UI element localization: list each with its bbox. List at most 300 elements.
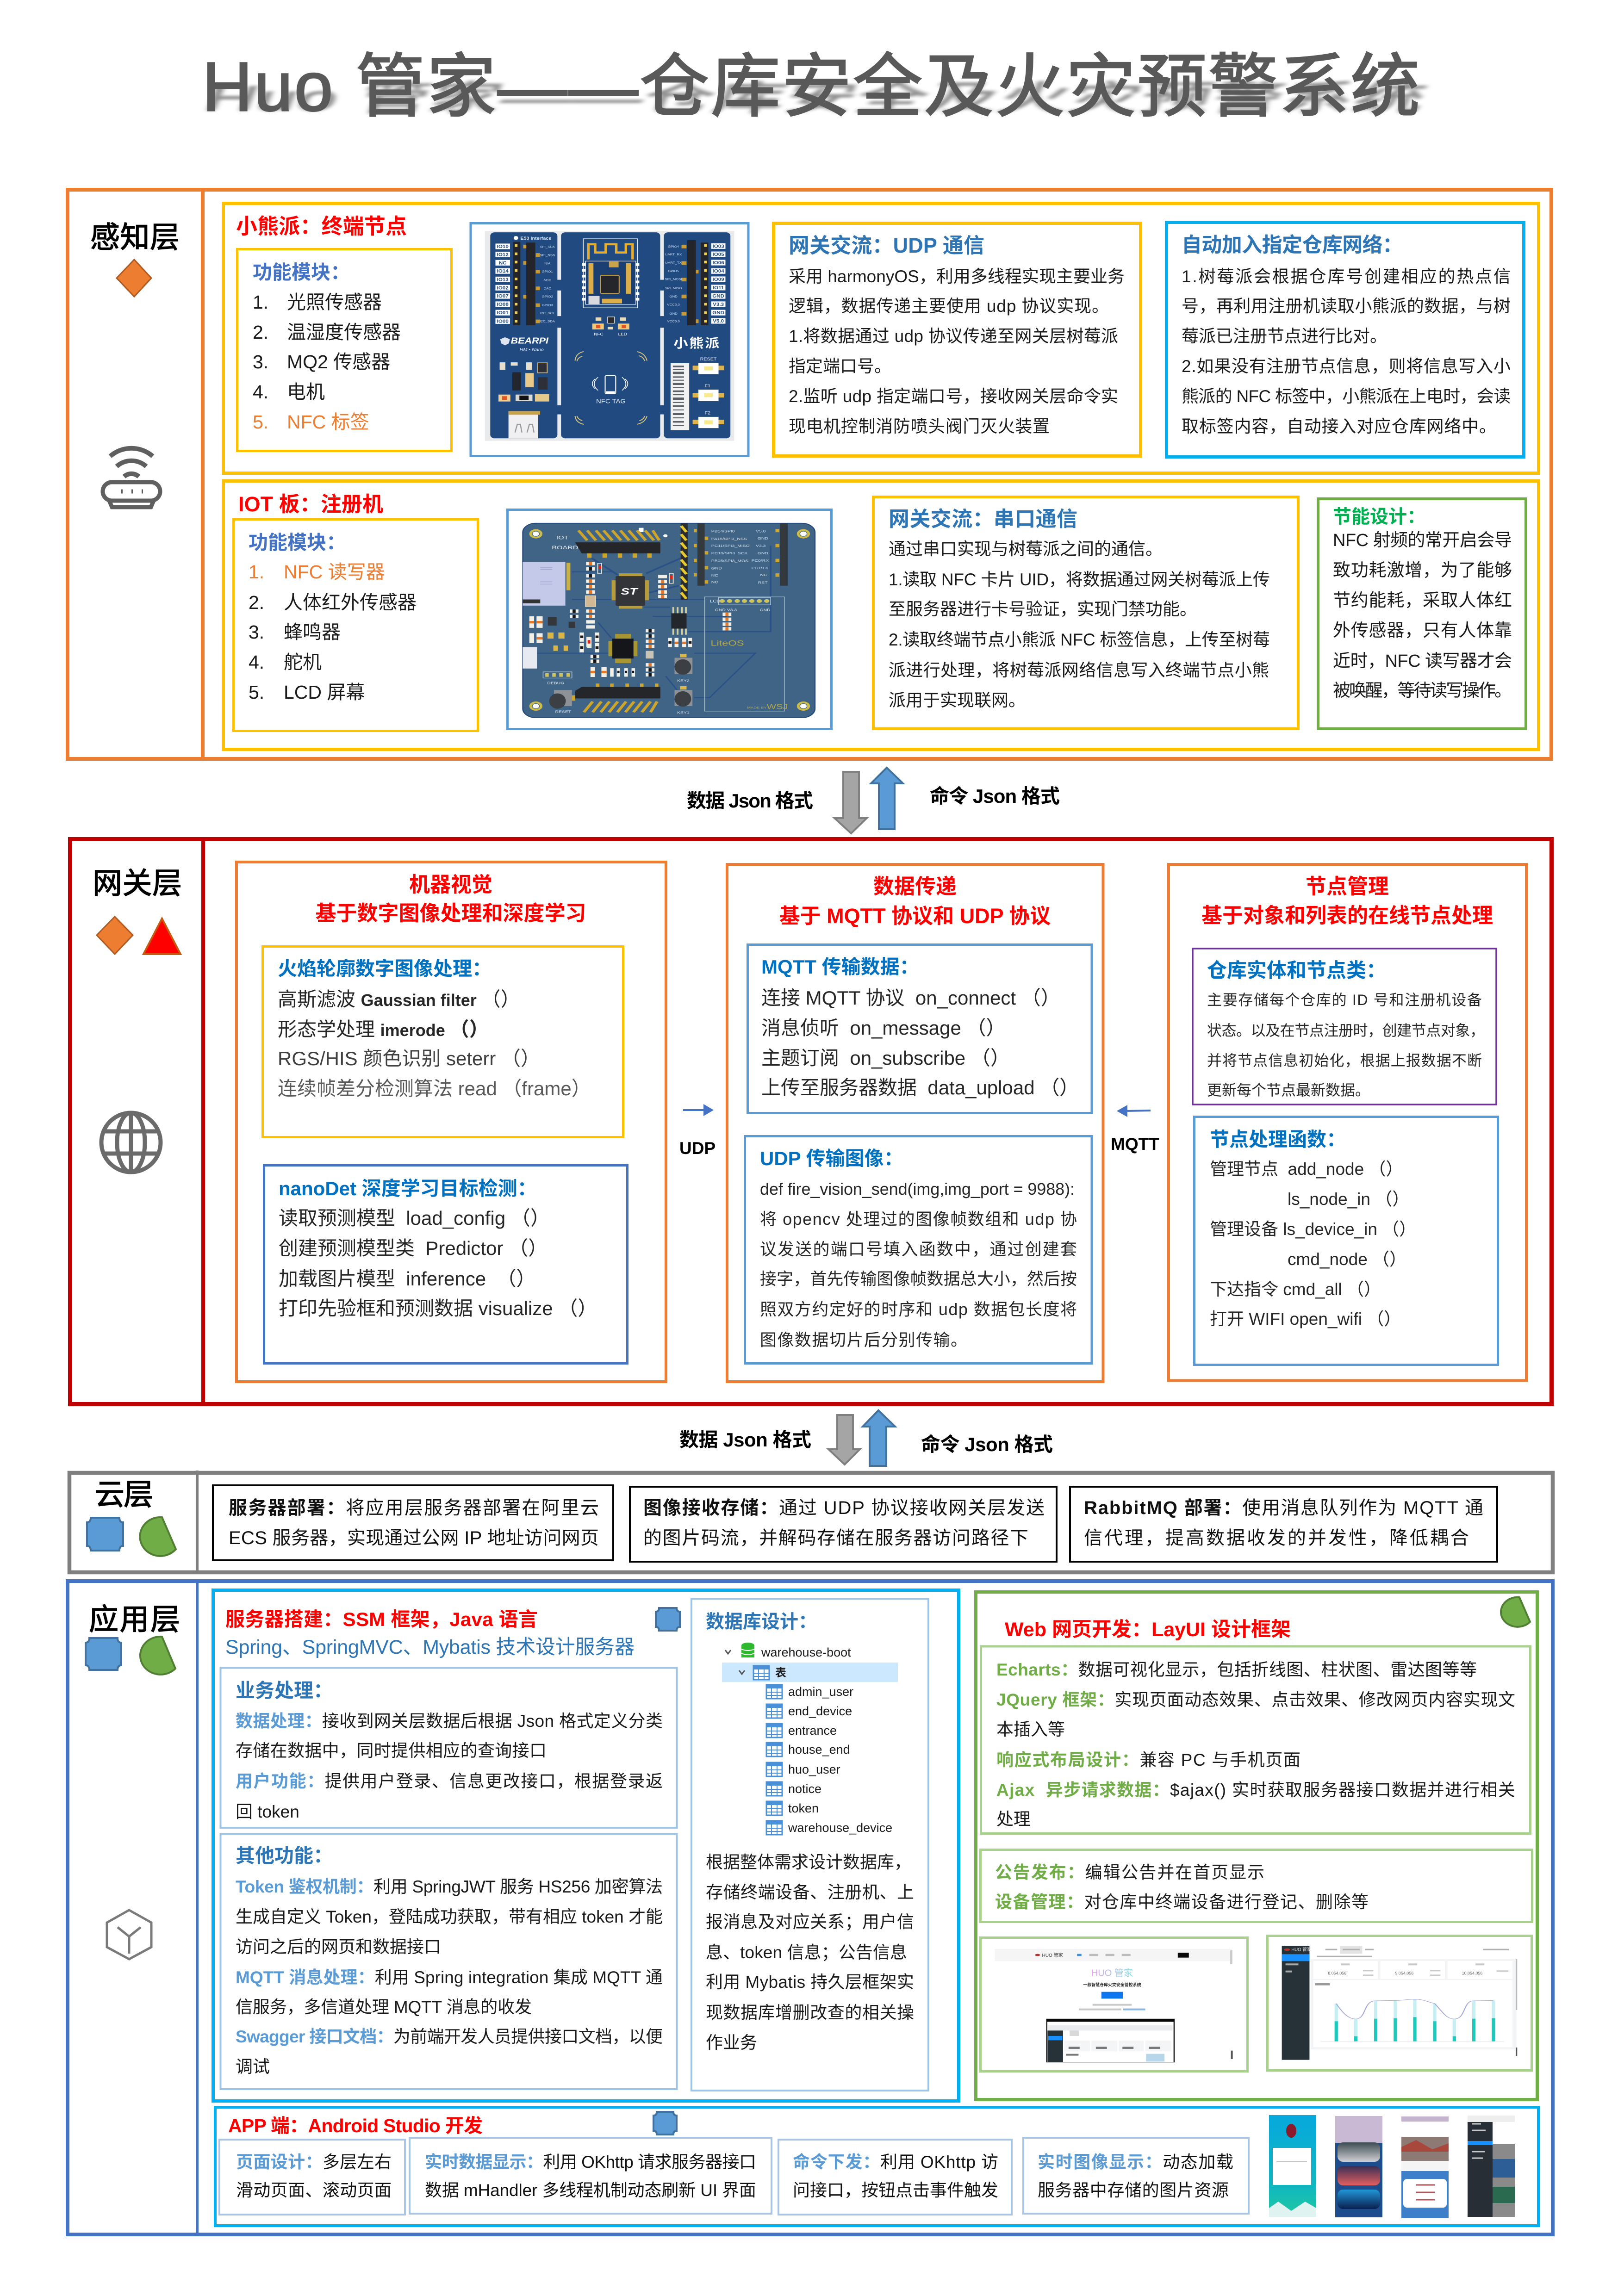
image: BearPi board: GPIO1 (542, 270, 553, 273)
panel: node management: 节点管理 (1306, 875, 1389, 898)
text block: serial gateway communication: 派进行处理，将树莓派网络信息写入终端节点小熊 (889, 661, 1269, 680)
heading: application layer: 应用层 (89, 1603, 180, 1636)
panel: database design: 根据整体需求设计数据库， (706, 1853, 911, 1872)
arrows: perception to gateway: 数据 Json 格式 (687, 790, 813, 812)
text block: web tech (981, 1646, 1530, 1833)
image: dashboard screenshot (1267, 1936, 1532, 2070)
text block: auto-join warehouse network: 2.如果没有注册节点信息，则将信息写入小 (1182, 357, 1511, 376)
image: BearPi board: NFC (594, 332, 604, 336)
text block: auto-join warehouse network: 1.树莓派会根据仓库号创建相应的热点信 (1182, 267, 1511, 286)
text block: energy saving design: 节能设计： (1333, 507, 1425, 527)
panel: server setup: Spring、SpringMVC、Mybatis 技术设计服务器 (225, 1636, 635, 1658)
image: BearPi board: UART_TX (665, 261, 682, 265)
text block: UDP gateway communication (774, 223, 1140, 456)
text block: node functions (1194, 1117, 1498, 1365)
text block: business processing: 存储在数据中，同时提供相应的查询接口 (236, 1741, 547, 1760)
arrows: gateway to cloud (679, 1410, 1053, 1466)
text block: page design: 页面设计：多层左右 (236, 2153, 392, 2172)
image: BearPi board: VCC3.3 (667, 303, 680, 306)
text block: serial gateway communication: 网关交流：串口通信 (889, 507, 1077, 531)
panel: machine vision: 基于数字图像处理和深度学习 (315, 901, 586, 925)
text block: UDP image transfer: def fire_vision_send(img,img_port = 9988): (760, 1179, 1075, 1198)
image: BearPi board: IO01 (497, 310, 509, 316)
panel: application layer (68, 1579, 1553, 2236)
text block: server deployment: 服务器部署：将应用层服务器部署在阿里云 (229, 1498, 599, 1518)
text block: business processing: 回 token (236, 1802, 299, 1821)
text block: page design (219, 2140, 405, 2215)
text block: RabbitMQ deployment: RabbitMQ 部署：使用消息队列作为 MQTT 通 (1084, 1498, 1483, 1518)
text block: page design: 滑动页面、滚动页面 (236, 2181, 392, 2200)
text block: flame contour image processing: 高斯滤波 Gaussian filter （） (278, 988, 520, 1010)
text block: serial gateway communication (873, 497, 1298, 729)
text block: other functions: 信服务，多信道处理 MQTT 消息的收发 (236, 1998, 532, 2017)
arrows: gateway to cloud: 命令 Json 格式 (921, 1433, 1053, 1455)
image: IoT board: V3.3 (756, 544, 765, 548)
icon: small blue plaque (656, 1608, 680, 1631)
image: BearPi board: ADC (543, 278, 552, 282)
arrow: MQTT (1111, 1105, 1159, 1154)
text block: realtime data display: 实时数据显示：利用 OKhttp 请求服务器接口 (425, 2153, 756, 2172)
text block: flame contour image processing: 连续帧差分检测算法 read （frame） (278, 1078, 591, 1099)
image: IoT board: GND V3.3 (715, 608, 737, 612)
text block: business processing: 用户功能：提供用户登录、信息更改接口，根据登录返 (236, 1772, 663, 1791)
image: homepage screenshot: HUO 管家 (1042, 1952, 1063, 1958)
text block: serial gateway communication: 派用于实现联网。 (889, 691, 1026, 710)
text block: auto-join warehouse network: 自动加入指定仓库网络： (1182, 234, 1403, 256)
image: IoT board: V5.0 (756, 529, 765, 533)
panel: function modules: 4. (253, 381, 268, 403)
panel: IoT function modules: 1. (249, 561, 264, 583)
text block: web tech: Echarts：数据可视化显示，包括折线图、柱状图、雷达图等等 (996, 1660, 1477, 1679)
image: BearPi board: UART_RX (665, 253, 682, 256)
text block: notices and devices: 公告发布：编辑公告并在首页显示 (995, 1863, 1264, 1882)
text block: UDP gateway communication: 1.将数据通过 udp 协议传递至网关层树莓派 (789, 327, 1118, 346)
image: BearPi board: IO04 (713, 269, 724, 274)
image: IoT board: GND (711, 566, 722, 570)
image: BearPi board: GND (669, 294, 678, 298)
image: BearPi board: SPI_MISO (665, 286, 682, 290)
text block: command dispatch: 命令下发：利用 OKhttp 访 (793, 2153, 998, 2172)
text block: warehouse entity and node class: 状态。以及在节点注册时，创建节点对象， (1207, 1022, 1485, 1039)
image: BearPi board: I2C_SDA (540, 319, 555, 323)
image: dashboard screenshot: 8,054,056 (1328, 1971, 1346, 1975)
image: IoT board: RST (758, 581, 768, 584)
panel: IoT function modules: 人体红外传感器 (284, 592, 417, 613)
panel: IoT function modules (233, 519, 478, 731)
image: BearPi board: IO06 (713, 261, 724, 266)
text block: web tech: 本插入等 (996, 1720, 1065, 1739)
image: dashboard screenshot: 9,054,056 (1395, 1971, 1413, 1975)
tree: database tables: entrance (788, 1724, 837, 1738)
arrow: UDP (679, 1104, 716, 1158)
panel: function modules: 3. (253, 351, 268, 372)
image: homepage screenshot: HUO 管家 (1091, 1968, 1133, 1979)
image: BearPi board: IO13 (497, 277, 509, 282)
text block: UDP image transfer: 图像数据切片后分别传输。 (760, 1330, 967, 1349)
image: BearPi board: GPIO2 (542, 295, 553, 298)
text block: command dispatch (778, 2140, 1012, 2215)
panel: database design: 报消息及对应关系；用户信 (706, 1912, 914, 1931)
text block: other functions: Token 鉴权机制：利用 SpringJWT 服务 HS256 加密算法 (236, 1877, 663, 1896)
image: BearPi board: E53 Interface (520, 236, 552, 241)
panel: database design: 存储终端设备、注册机、上 (706, 1883, 914, 1902)
text block: flame contour image processing (263, 947, 623, 1137)
panel: node management (1169, 864, 1526, 1381)
image: BearPi board: IO05 (713, 252, 724, 257)
text block: nanoDet detection (264, 1165, 628, 1363)
text block: nanoDet detection: nanoDet 深度学习目标检测： (279, 1178, 537, 1199)
text block: energy saving design: NFC 射频的常开启会导 (1333, 531, 1512, 550)
image: BearPi board: IO07 (497, 294, 509, 299)
image: BearPi board: GPIO5 (668, 269, 679, 273)
image: BearPi board: IO08 (497, 302, 509, 307)
text block: flame contour image processing: 形态学处理 imerode （） (278, 1018, 489, 1040)
text block: auto-join warehouse network: 莓派已注册节点进行比对。 (1182, 327, 1387, 346)
text block: web tech: Ajax 异步请求数据：$ajax() 实时获取服务器接口数据并进行相关 (996, 1781, 1515, 1800)
panel: database design: 数据库设计： (706, 1612, 817, 1632)
text block: nanoDet detection: 创建预测模型类 Predictor （） (279, 1237, 548, 1259)
panel: data transfer: 基于 MQTT 协议和 UDP 协议 (779, 904, 1051, 928)
image: IoT board: PC0/RX (752, 558, 769, 563)
text block: image receiving storage: 的图片码流，并解码存储在服务器访问路径下 (643, 1528, 1028, 1548)
tree: database tables: notice (788, 1782, 821, 1796)
icon: green chord (140, 1637, 175, 1675)
panel: function modules: 电机 (287, 381, 325, 403)
text block: other functions: 调试 (236, 2057, 270, 2076)
image: BearPi board: RESET (700, 357, 717, 362)
image: BearPi board: F2 (705, 411, 711, 416)
text block: UDP image transfer: 将 opencv 处理过的图像帧数组和 udp 协 (760, 1210, 1077, 1229)
text block: business processing (220, 1668, 677, 1828)
image: IoT board: NC (711, 580, 718, 584)
image: IoT board: NC (711, 573, 718, 577)
tree: database tables: warehouse_device (788, 1821, 892, 1835)
panel: database design: 息、token 信息；公告信息 (706, 1943, 907, 1962)
image: BearPi board: IO03 (713, 244, 724, 249)
text block: nanoDet detection: 打印先验框和预测数据 visualize （） (279, 1297, 597, 1319)
image: IoT board: IOT (556, 534, 569, 540)
icon: diamond (97, 917, 133, 954)
text block: UDP gateway communication: 采用 harmonyOS，利用多线程实现主要业务 (789, 267, 1125, 286)
title: Huo 管家——仓库安全及火灾预警系统 (199, 79, 1432, 118)
image: IoT board: GND (760, 608, 771, 612)
panel: function modules: 温湿度传感器 (287, 322, 401, 343)
heading: gateway layer: 网关层 (93, 867, 182, 900)
image: BearPi board: GND (712, 310, 724, 316)
text block: realtime data display (410, 2138, 772, 2214)
text block: UDP image transfer: 接字，首先传输图像帧数据总大小，然后按 (760, 1269, 1077, 1288)
panel: gateway layer (70, 837, 1551, 1406)
image: IoT board: PA15/SPI3_NSS (711, 537, 747, 541)
image: BearPi board: SPI_MOSI (665, 277, 682, 281)
icon: globe (101, 1113, 161, 1172)
text block: serial gateway communication: 通过串口实现与树莓派之间的通信。 (889, 540, 1163, 558)
text block: flame contour image processing: 火焰轮廓数字图像处理： (278, 958, 492, 980)
image: IoT board: GND (758, 552, 769, 555)
image: BearPi board: IO10 (497, 244, 509, 249)
text block: energy saving design (1318, 499, 1526, 729)
text block: UDP gateway communication: 网关交流：UDP 通信 (789, 234, 984, 257)
arrow: UDP: UDP (679, 1139, 716, 1158)
panel: machine vision (236, 862, 666, 1382)
panel: function modules: MQ2 传感器 (287, 351, 390, 372)
text block: UDP image transfer: 照双方约定好的时序和 udp 数据包长度将 (760, 1300, 1077, 1319)
panel: perception layer (68, 188, 1551, 761)
text block: UDP image transfer (745, 1136, 1092, 1363)
image: app screen login (1269, 2115, 1316, 2217)
text block: other functions: Swagger 接口文档：为前端开发人员提供接口文档，以便 (236, 2027, 663, 2046)
tree: database tables: house_end (788, 1743, 850, 1756)
image: BearPi board: I2C_SCL (540, 311, 555, 315)
text block: notices and devices (980, 1850, 1532, 1922)
image: BearPi board: V3.3 (713, 302, 724, 307)
image: IoT board: KEY2 (677, 679, 690, 683)
image: BearPi board: 小熊派 (673, 336, 720, 350)
image: homepage screenshot (980, 1938, 1248, 2071)
text block: command dispatch: 问接口，按钮点击事件触发 (793, 2181, 998, 2200)
icon: orange diamond (117, 260, 151, 297)
text block: serial gateway communication: 2.读取终端节点小熊派 NFC 标签信息，上传至树莓 (889, 630, 1270, 649)
text block: UDP gateway communication: 现电机控制消防喷头阀门灭火装置 (789, 417, 1050, 436)
text block: MQTT data: 消息侦听 on_message （） (761, 1017, 1006, 1039)
panel: database design: 现数据库增删改查的相关操 (706, 2003, 914, 2022)
image: IoT board: DEBUG (547, 681, 564, 685)
image: BearPi board: N/A (544, 261, 550, 265)
image: dashboard screenshot: 10,054,056 (1462, 1971, 1482, 1975)
text block: RabbitMQ deployment: 信代理，提高数据收发的并发性，降低耦合 (1084, 1528, 1469, 1548)
text block: UDP image transfer: UDP 传输图像： (760, 1148, 903, 1169)
text block: node functions: 管理节点 add_node （） (1210, 1160, 1403, 1179)
heading: BearPi: 小熊派：终端节点 (236, 214, 407, 238)
icon: triangle (143, 918, 180, 954)
image: BearPi board: GPIO4 (668, 245, 679, 248)
text block: auto-join warehouse network: 号，再利用注册机读取小熊派的数据，与树 (1182, 297, 1511, 316)
image: BearPi board: F1 (705, 384, 711, 389)
text block: node functions: 下达指令 cmd_all （） (1210, 1280, 1381, 1299)
image: IoT board: LiteOS (710, 639, 744, 648)
image: BearPi board: IO02 (497, 285, 509, 291)
panel: function modules: NFC 标签 (287, 411, 369, 433)
icon: router (103, 448, 160, 507)
text block: realtime image display: 服务器中存储的图片资源 (1038, 2181, 1229, 2200)
text block: energy saving design: 近时，NFC 读写器才会 (1333, 652, 1512, 671)
text block: warehouse entity and node class: 主要存储每个仓库的 ID 号和注册机设备 (1207, 992, 1482, 1008)
image: IoT board: PC10/SPI3_SCK (711, 552, 747, 555)
panel: database design: 利用 Mybatis 持久层框架实 (706, 1973, 914, 1992)
text block: energy saving design: 节约能耗，采取人体红 (1333, 591, 1512, 610)
tree: database tables: warehouse-boot (761, 1645, 851, 1659)
text block: realtime image display: 实时图像显示：动态加载 (1038, 2153, 1233, 2172)
text block: MQTT data: 连接 MQTT 协议 on_connect （） (761, 987, 1060, 1009)
panel: IoT function modules: NFC 读写器 (284, 561, 385, 583)
text block: warehouse entity and node class: 仓库实体和节点类： (1207, 960, 1386, 982)
panel: data transfer: 数据传递 (873, 875, 957, 898)
image: BearPi board: NC (499, 261, 507, 266)
arrows: perception to gateway (687, 768, 1060, 833)
image: BearPi board: VCC5.0 (667, 319, 680, 323)
title: Huo 管家——仓库安全及火灾预警系统 (202, 48, 1420, 125)
text block: MQTT data (748, 945, 1092, 1113)
panel: function modules: 5. (253, 411, 268, 433)
icon: small blue plaque (653, 2112, 677, 2135)
image: BearPi board: LED (618, 332, 627, 336)
image: BearPi board: IO14 (497, 269, 509, 274)
image: BearPi board: BEARPI (511, 336, 548, 346)
text block: warehouse entity and node class: 更新每个节点最新数据。 (1207, 1082, 1370, 1098)
panel: function modules: 2. (253, 322, 268, 343)
text block: node functions: 管理设备 ls_device_in （） (1210, 1220, 1416, 1239)
image: BearPi board: GPIO3 (542, 303, 553, 307)
text block: other functions: 生成自定义 Token，登陆成功获取，带有相应 token 才能 (236, 1907, 663, 1926)
image: BearPi board: GND (669, 311, 678, 316)
text block: server deployment (213, 1485, 613, 1560)
image: IoT board: MADE BY (747, 706, 767, 709)
tree: database tables (722, 1643, 898, 1835)
panel: function modules: 1. (253, 292, 268, 313)
image: IoT board: PC11/SPI3_MISO (711, 544, 750, 548)
heading: cloud layer: 云层 (95, 1478, 153, 1511)
text block: energy saving design: 外传感器，只有人体靠 (1333, 621, 1512, 640)
heading: IoT board: IOT 板：注册机 (238, 492, 383, 516)
image: BearPi board: IO11 (713, 285, 724, 291)
text block: UDP gateway communication: 指定端口号。 (789, 357, 891, 376)
arrows: perception to gateway: 命令 Json 格式 (930, 785, 1060, 807)
image: IoT board: ST (621, 587, 639, 597)
image: BearPi board: NFC TAG (596, 398, 626, 404)
text block: web tech: 处理 (996, 1810, 1031, 1829)
panel: IoT function modules: LCD 屏幕 (284, 682, 365, 703)
image: IoT board (507, 510, 831, 729)
panel: app development: APP 端：Android Studio 开发 (228, 2115, 483, 2136)
text block: MQTT data: 主题订阅 on_subscribe （） (761, 1047, 1010, 1069)
panel: IoT function modules: 蜂鸣器 (284, 621, 341, 643)
panel: server setup (213, 1590, 959, 2101)
image: BearPi board: HM • Nano (520, 348, 544, 352)
panel: BearPi terminal node (223, 204, 1538, 473)
panel: app development (215, 2107, 1538, 2226)
text block: MQTT data: MQTT 传输数据： (761, 956, 919, 978)
text block: serial gateway communication: 至服务器进行卡号验证，实现门禁功能。 (889, 600, 1197, 619)
text block: warehouse entity and node class: 并将节点信息初始化，根据上报数据不断 (1207, 1052, 1482, 1069)
arrows: gateway to cloud: 数据 Json 格式 (679, 1429, 811, 1451)
icon: green chord (140, 1517, 176, 1556)
text block: UDP gateway communication: 2.监听 udp 指定端口号，接收网关层命令实 (789, 387, 1118, 406)
image: IoT board: KEY1 (677, 711, 690, 714)
panel: database design (691, 1599, 928, 2091)
text block: other functions: 其他功能： (236, 1845, 333, 1867)
panel: IoT function modules: 功能模块： (249, 532, 346, 553)
tree: database tables: end_device (788, 1704, 852, 1718)
image: BearPi board: SPI_SCK (540, 245, 555, 249)
panel: IoT function modules: 4. (249, 652, 264, 673)
panel: function modules: 功能模块： (253, 261, 350, 283)
panel: cloud layer (69, 1471, 1553, 1574)
text block: energy saving design: 致功耗激增，为了能够 (1333, 561, 1512, 580)
image: app screen cards (1335, 2116, 1382, 2217)
image: IoT board: WSJ (767, 703, 788, 711)
text block: business processing: 业务处理： (236, 1680, 333, 1701)
panel: IoT function modules: 2. (249, 592, 264, 613)
text block: warehouse entity and node class (1193, 949, 1496, 1105)
icon: small green chord (1501, 1597, 1530, 1627)
text block: auto-join warehouse network (1166, 222, 1524, 457)
text block: node functions: 节点处理函数： (1210, 1129, 1346, 1150)
image: IoT board: GND (758, 537, 769, 540)
icon: blue plaque (87, 1518, 123, 1551)
text block: auto-join warehouse network: 熊派的 NFC 标签中，小熊派在上电时，会读 (1182, 387, 1511, 406)
image: IoT board: LCD (710, 600, 721, 604)
image: IoT board: BOARD (552, 544, 578, 550)
image: BearPi board: IO12 (497, 252, 509, 257)
text block: realtime data display: 数据 mHandler 多线程机制动态刷新 UI 界面 (425, 2181, 756, 2200)
image: app screen dashboard (1468, 2116, 1515, 2217)
text block: other functions: MQTT 消息处理：利用 Spring integration 集成 MQTT 通 (236, 1968, 663, 1987)
text block: web tech: 响应式布局设计：兼容 PC 与手机页面 (996, 1750, 1300, 1769)
panel: node management: 基于对象和列表的在线节点处理 (1201, 904, 1493, 927)
panel: IoT function modules: 舵机 (284, 652, 322, 673)
text block: image receiving storage (630, 1487, 1057, 1562)
image: app screen photo (1401, 2116, 1449, 2218)
panel: function modules: 光照传感器 (287, 292, 382, 313)
tree: database tables: huo_user (788, 1762, 840, 1776)
panel: IoT function modules: 5. (249, 682, 264, 703)
panel: machine vision: 机器视觉 (409, 873, 492, 896)
image: BearPi board: IO00 (497, 319, 509, 324)
text block: notices and devices: 设备管理：对仓库中终端设备进行登记、删除等 (995, 1893, 1369, 1911)
image: BearPi board (471, 223, 748, 456)
text block: UDP image transfer: 议发送的端口号填入函数中，通过创建套 (760, 1240, 1077, 1259)
text block: business processing: 数据处理：接收到网关层数据后根据 Json 格式定义分类 (236, 1712, 663, 1731)
text block: energy saving design: 被唤醒，等待读写操作。 (1333, 681, 1512, 701)
panel: database design: 作业务 (706, 2033, 757, 2052)
arrow: MQTT: MQTT (1111, 1135, 1159, 1154)
icon: hexagon cube (107, 1910, 151, 1959)
text block: server deployment: ECS 服务器，实现通过公网 IP 地址访问网页 (229, 1528, 599, 1548)
image: BearPi board: DAC (543, 286, 552, 290)
text block: UDP gateway communication: 逻辑，数据传递主要使用 udp 协议实现。 (789, 297, 1109, 316)
image: homepage screenshot: 一款智慧仓库火灾安全管控系统 (1083, 1982, 1141, 1987)
text block: flame contour image processing: RGS/HIS 颜色识别 seterr （） (278, 1048, 540, 1069)
image: IoT board: PC1/TX (752, 566, 768, 570)
tree: database tables: token (788, 1801, 819, 1815)
image: BearPi board: GND (712, 294, 724, 299)
text block: node functions: 打开 WIFI open_wifi （） (1210, 1309, 1401, 1328)
text block: image receiving storage: 图像接收存储：通过 UDP 协议接收网关层发送 (643, 1498, 1045, 1518)
panel: data transfer (727, 864, 1103, 1382)
text block: web tech: JQuery 框架：实现页面动态效果、点击效果、修改网页内容实现文 (996, 1690, 1515, 1709)
text block: MQTT data: 上传至服务器数据 data_upload （） (761, 1077, 1079, 1098)
image: BearPi board: SPI_NSS (540, 253, 555, 257)
image: IoT board: PB14/SPI0 (711, 529, 735, 533)
panel: server setup: 服务器搭建：SSM 框架，Java 语言 (225, 1608, 538, 1630)
heading: perception layer: 感知层 (90, 221, 180, 254)
panel: function modules (237, 249, 452, 451)
text block: realtime image display (1023, 2138, 1249, 2214)
panel: web development (976, 1592, 1537, 2100)
panel: IoT board registrar (223, 481, 1538, 750)
text block: auto-join warehouse network: 取标签内容，自动接入对应仓库网络中。 (1182, 417, 1496, 436)
icon: blue plaque (86, 1638, 121, 1670)
image: IoT board: PB05/SPI3_MOSI (711, 559, 750, 563)
tree: database tables: 表 (775, 1667, 786, 1679)
image: BearPi board: V5.0 (713, 319, 724, 324)
text block: nanoDet detection: 读取预测模型 load_config （） (279, 1207, 550, 1229)
text block: node functions: ls_node_in （） (1288, 1190, 1409, 1209)
text block: nanoDet detection: 加载图片模型 inference （） (279, 1268, 535, 1290)
text block: other functions: 访问之后的网页和数据接口 (236, 1937, 441, 1956)
text block: node functions: cmd_node （） (1288, 1250, 1406, 1269)
image: dashboard screenshot: HUO 管家 (1291, 1946, 1312, 1953)
